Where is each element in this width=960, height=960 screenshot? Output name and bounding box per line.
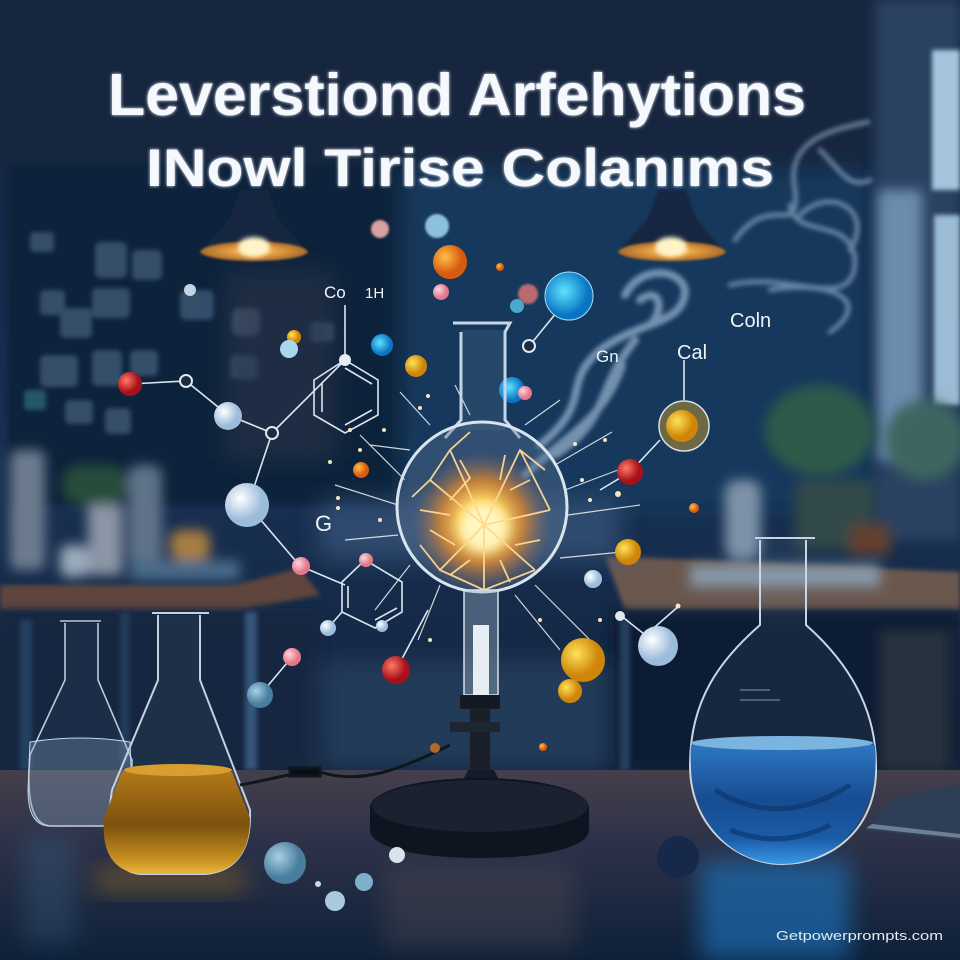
background clutter xyxy=(10,385,960,587)
molecule labels: 1H xyxy=(365,285,384,302)
reaction spark lines xyxy=(335,385,640,650)
title: Leverstiond Arfehytions xyxy=(108,62,806,128)
molecule labels: G xyxy=(315,511,332,536)
pendant lamp left xyxy=(200,190,308,261)
smoke wisps xyxy=(525,122,870,475)
flask stand and burner base xyxy=(370,590,589,858)
erlenmeyer flask: amber liquid xyxy=(104,613,250,874)
molecule labels xyxy=(315,283,771,536)
title xyxy=(108,62,806,198)
background desks xyxy=(0,568,320,610)
central reaction flask xyxy=(397,323,567,592)
title: INowl Tirise Colanıms xyxy=(146,139,774,198)
atom spheres xyxy=(118,214,709,751)
table spheres xyxy=(264,836,699,911)
molecular bond network xyxy=(130,296,684,695)
round flask: blue liquid xyxy=(690,538,876,864)
molecule labels: Co xyxy=(324,283,346,302)
molecule labels: Coln xyxy=(730,310,771,332)
molecule labels: Gn xyxy=(596,347,619,366)
pendant lamp right xyxy=(618,190,726,261)
table xyxy=(0,770,960,960)
spark particles xyxy=(328,394,680,642)
molecule labels: Cal xyxy=(677,342,707,364)
watermark: Getpowerprompts.com xyxy=(776,928,943,943)
erlenmeyer flask: clear water xyxy=(28,621,132,826)
power cable xyxy=(240,743,450,785)
